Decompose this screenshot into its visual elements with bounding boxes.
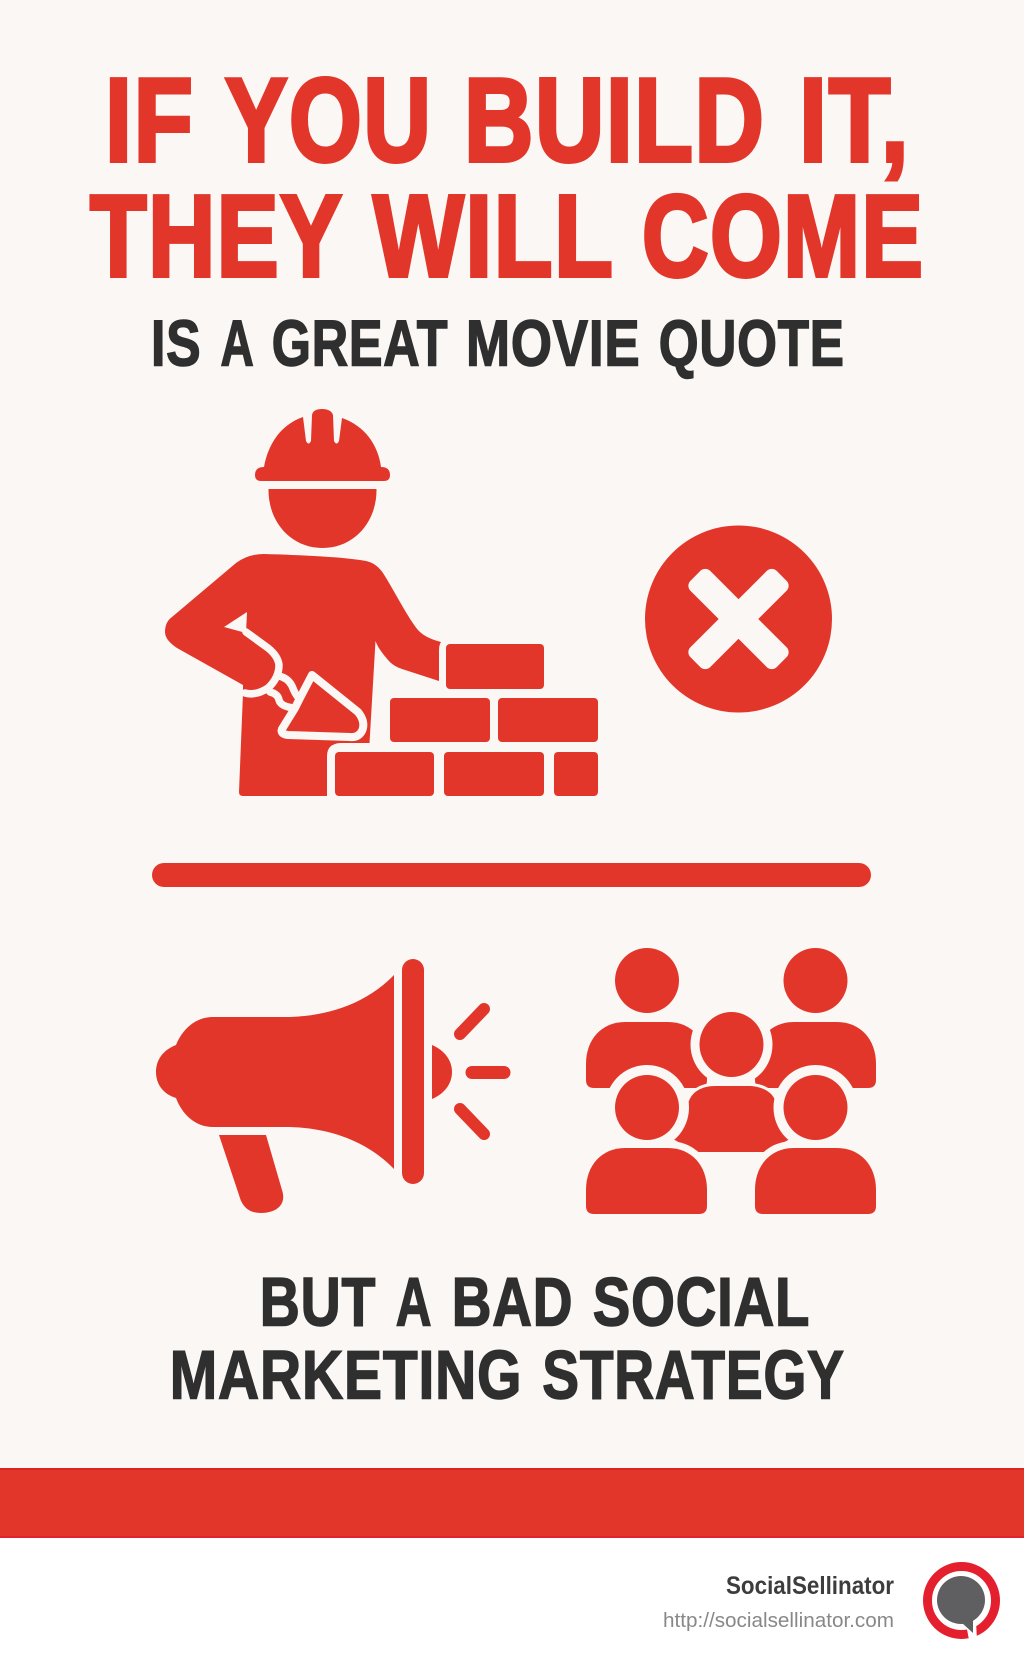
subtitle: A xyxy=(220,307,254,379)
bottom right person body xyxy=(755,1148,876,1214)
bricks xyxy=(335,644,598,796)
logo: speech bubble in ring xyxy=(928,1566,996,1640)
subtitle xyxy=(151,307,845,379)
footer brand text xyxy=(663,1572,894,1632)
footer brand text: SocialSellinator xyxy=(726,1572,894,1600)
top right person body xyxy=(755,1022,876,1088)
subtitle: QUOTE xyxy=(659,307,845,379)
worker head xyxy=(268,489,377,548)
top right person head xyxy=(784,948,848,1013)
worker arm outline xyxy=(224,612,247,633)
subtitle: GREAT xyxy=(272,307,448,379)
icon: X in a circle xyxy=(645,526,832,712)
megaphone handle xyxy=(219,1135,283,1213)
trowel xyxy=(270,675,363,737)
icon: megaphone xyxy=(156,959,504,1213)
red footer band xyxy=(0,1468,1024,1538)
closing statement xyxy=(170,1263,845,1413)
title: BUILD xyxy=(464,54,766,187)
top left person body xyxy=(586,1022,707,1088)
icon: group of people xyxy=(586,948,876,1214)
icon: construction worker laying bricks xyxy=(165,409,598,796)
divider bar xyxy=(152,863,871,887)
center person body xyxy=(673,1086,790,1152)
closing statement: BAD xyxy=(452,1263,573,1340)
center person head xyxy=(700,1012,764,1077)
title: THEY xyxy=(90,171,344,301)
subtitle: MOVIE xyxy=(466,307,640,379)
worker body xyxy=(165,554,441,796)
closing statement: A xyxy=(396,1263,432,1340)
title xyxy=(90,54,924,301)
title: YOU xyxy=(225,54,432,187)
megaphone rim xyxy=(402,959,424,1184)
title: IT, xyxy=(799,54,910,187)
title: COME xyxy=(642,171,924,301)
megaphone horn xyxy=(156,975,394,1169)
closing statement: MARKETING xyxy=(170,1336,522,1413)
title: IF xyxy=(105,54,194,187)
sound rays xyxy=(460,1009,504,1134)
bottom left person body xyxy=(586,1148,707,1214)
footer brand text: http://socialsellinator.com xyxy=(663,1609,894,1632)
bottom left person head xyxy=(615,1075,679,1140)
bottom right person head xyxy=(784,1075,848,1140)
megaphone sound dome xyxy=(432,1045,452,1099)
top left person head xyxy=(615,948,679,1013)
closing statement: STRATEGY xyxy=(542,1336,845,1413)
title: WILL xyxy=(373,171,614,301)
closing statement: BUT xyxy=(260,1263,376,1340)
icon: hard hat xyxy=(255,409,390,481)
closing statement: SOCIAL xyxy=(593,1263,810,1340)
subtitle: IS xyxy=(151,307,202,379)
